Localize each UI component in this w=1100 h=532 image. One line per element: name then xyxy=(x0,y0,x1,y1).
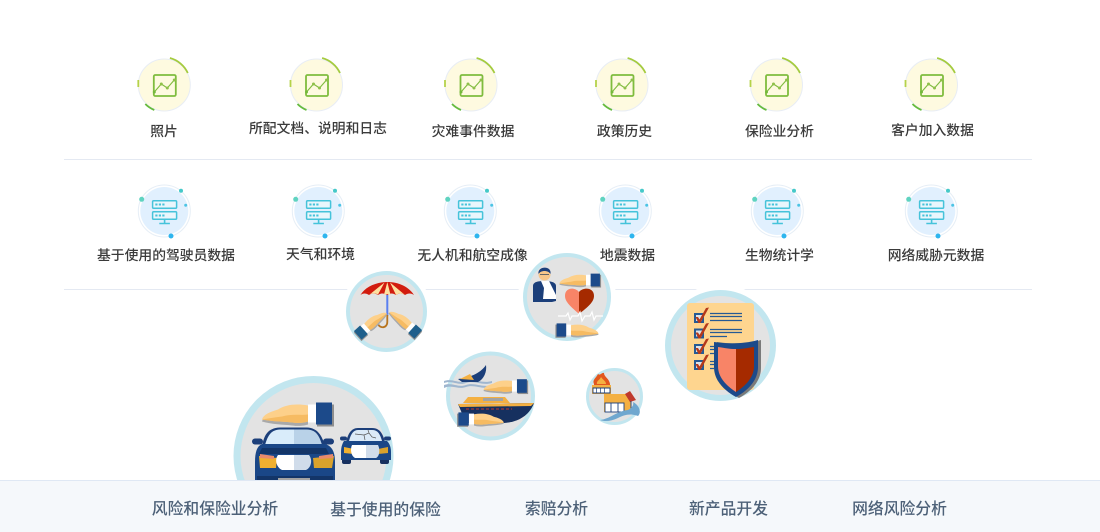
row 2 divider xyxy=(64,288,1032,290)
item: photos xyxy=(138,58,190,139)
item: weather: 天气和环境 xyxy=(286,246,355,262)
illustration: umbrella xyxy=(342,266,432,356)
item: earthquake xyxy=(599,185,655,263)
item: policy history: 政策历史 xyxy=(597,123,652,139)
footer label: usage-based insurance: 基于使用的保险 xyxy=(330,501,441,519)
item: policy history xyxy=(596,58,652,139)
item: disaster data xyxy=(432,58,515,139)
illustration: car insurance xyxy=(237,380,391,532)
row 1 divider xyxy=(64,158,1032,160)
item: drone imaging: 无人机和航空成像 xyxy=(417,247,528,263)
item: driver data: 基于使用的驾驶员数据 xyxy=(97,247,235,263)
footer bar xyxy=(0,480,1100,532)
item: photos: 照片 xyxy=(150,124,178,139)
item: documents xyxy=(249,58,387,136)
item: weather xyxy=(286,185,355,262)
item: earthquake: 地震数据 xyxy=(600,248,655,263)
panel: data sources row 1 xyxy=(138,58,974,139)
panel: data sources row 2 xyxy=(97,185,984,263)
footer label: claims analysis: 索赔分析 xyxy=(525,500,588,518)
footer label: new product development: 新产品开发 xyxy=(689,500,768,518)
item: insurance analytics xyxy=(745,58,814,139)
item: disaster data: 灾难事件数据 xyxy=(432,123,515,139)
item: cyber threat xyxy=(888,185,984,263)
footer label: cyber risk analysis: 网络风险分析 xyxy=(852,499,947,518)
footer label: risk analysis: 风险和保险业分析 xyxy=(152,500,278,518)
illustration: checklist and shield xyxy=(660,284,782,406)
illustration: boat insurance xyxy=(444,354,534,438)
item: documents: 所配文档、说明和日志 xyxy=(249,120,387,136)
item: biometrics xyxy=(745,185,814,263)
item: customer data xyxy=(891,58,974,138)
illustration: health insurance xyxy=(518,248,616,346)
item: customer data: 客户加入数据 xyxy=(891,122,974,138)
illustration: property insurance xyxy=(588,370,642,424)
item: drone imaging xyxy=(417,185,528,263)
item: insurance analytics: 保险业分析 xyxy=(745,123,814,139)
item: biometrics: 生物统计学 xyxy=(745,247,814,263)
item: driver data xyxy=(97,185,235,263)
item: cyber threat: 网络威胁元数据 xyxy=(888,247,984,263)
